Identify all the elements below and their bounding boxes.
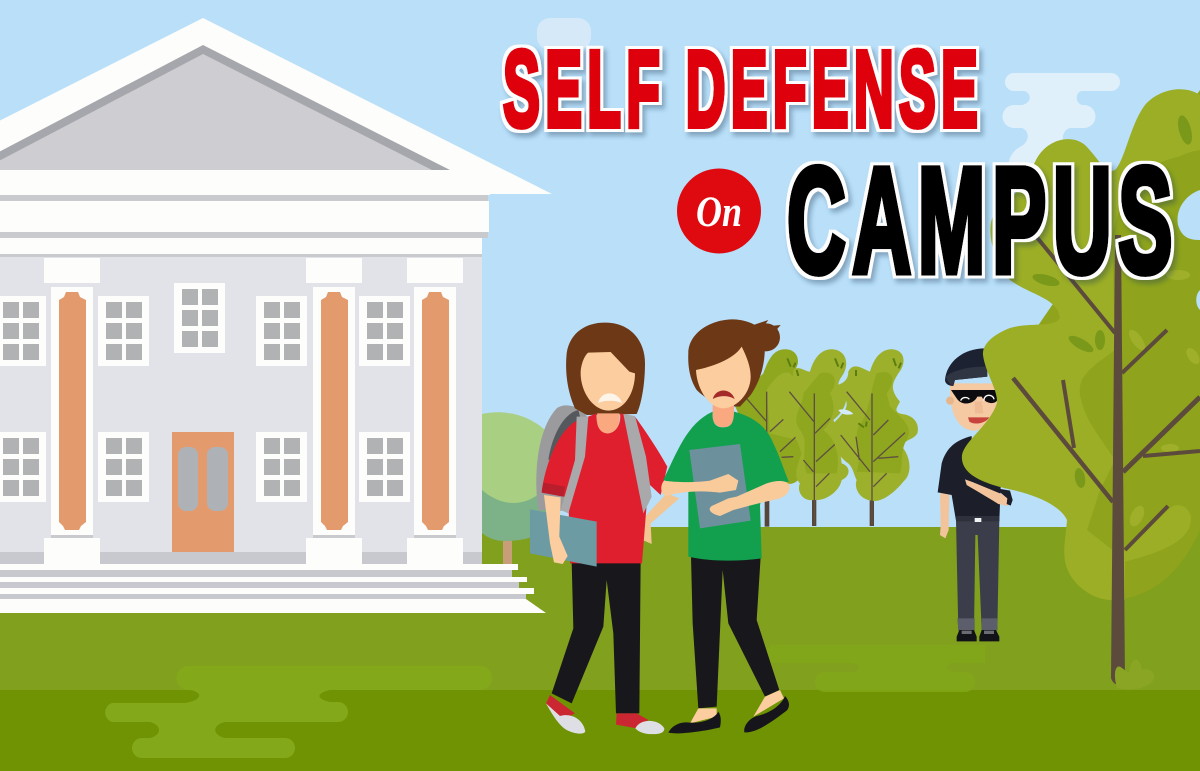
- girl 1 reaching arm: [643, 493, 679, 544]
- sky: [0, 0, 1200, 530]
- sky gap in foliage: [838, 409, 853, 415]
- background round trees: [482, 412, 548, 566]
- big tree dark foliage: [1035, 90, 1200, 600]
- big tree: [962, 89, 1200, 690]
- steps: [0, 564, 546, 613]
- girl 1 left arm: [544, 495, 568, 564]
- big tree leaves: [1031, 114, 1195, 489]
- roof: [0, 18, 552, 194]
- thief head: [945, 348, 998, 431]
- badge: on: [677, 168, 761, 254]
- cloud: right: [1002, 73, 1120, 175]
- thief legs: [956, 520, 999, 641]
- mid-ground trees: [732, 349, 918, 527]
- tree 2: [783, 349, 849, 526]
- door: [172, 432, 234, 552]
- girl 1 hair: [566, 323, 645, 415]
- thief body: [938, 436, 1001, 538]
- big tree upper right lobe: [1120, 150, 1200, 340]
- girl 1 neck and face: [581, 352, 635, 433]
- big tree foliage: [962, 89, 1200, 600]
- entablature: [0, 170, 490, 254]
- thief arm in front of foliage: [965, 479, 1013, 506]
- sky gaps in foliage: [1177, 190, 1200, 310]
- big tree pale leaves: [1126, 270, 1200, 529]
- ground: [0, 527, 1200, 771]
- badge: on: On: [696, 189, 742, 236]
- bush at trunk base: [1115, 660, 1154, 690]
- windows: [0, 283, 410, 502]
- girl 2 book: [689, 444, 751, 528]
- girl 1 legs: [546, 558, 664, 734]
- title: [503, 28, 1179, 304]
- building: [0, 18, 552, 613]
- girl 1 backpack: [536, 405, 652, 513]
- girl 1 straps: [561, 414, 652, 513]
- wall: [0, 254, 482, 564]
- girl 1 shirt: [542, 413, 667, 563]
- girl 2 legs: [668, 557, 789, 733]
- grass patch: right: [766, 645, 985, 692]
- girl 2 neck and face: [696, 347, 751, 427]
- thief: [938, 348, 1001, 641]
- cloud: top centre: [537, 18, 591, 50]
- girl with backpack and book: [530, 323, 679, 734]
- girl with hair bun: [661, 319, 789, 733]
- tree 1: [732, 349, 811, 527]
- girl 2 shirt: [663, 412, 789, 561]
- big tree lower right lobe: [1124, 505, 1191, 562]
- girl 2 arms: [661, 474, 789, 516]
- big tree trunk and branches: [1013, 235, 1200, 685]
- grass patches: [105, 645, 985, 758]
- grass patch: left: [105, 666, 492, 758]
- columns: [44, 258, 463, 565]
- tree 3: [832, 349, 918, 526]
- girl 1 book: [530, 509, 597, 567]
- girl 2 hair: [688, 319, 781, 407]
